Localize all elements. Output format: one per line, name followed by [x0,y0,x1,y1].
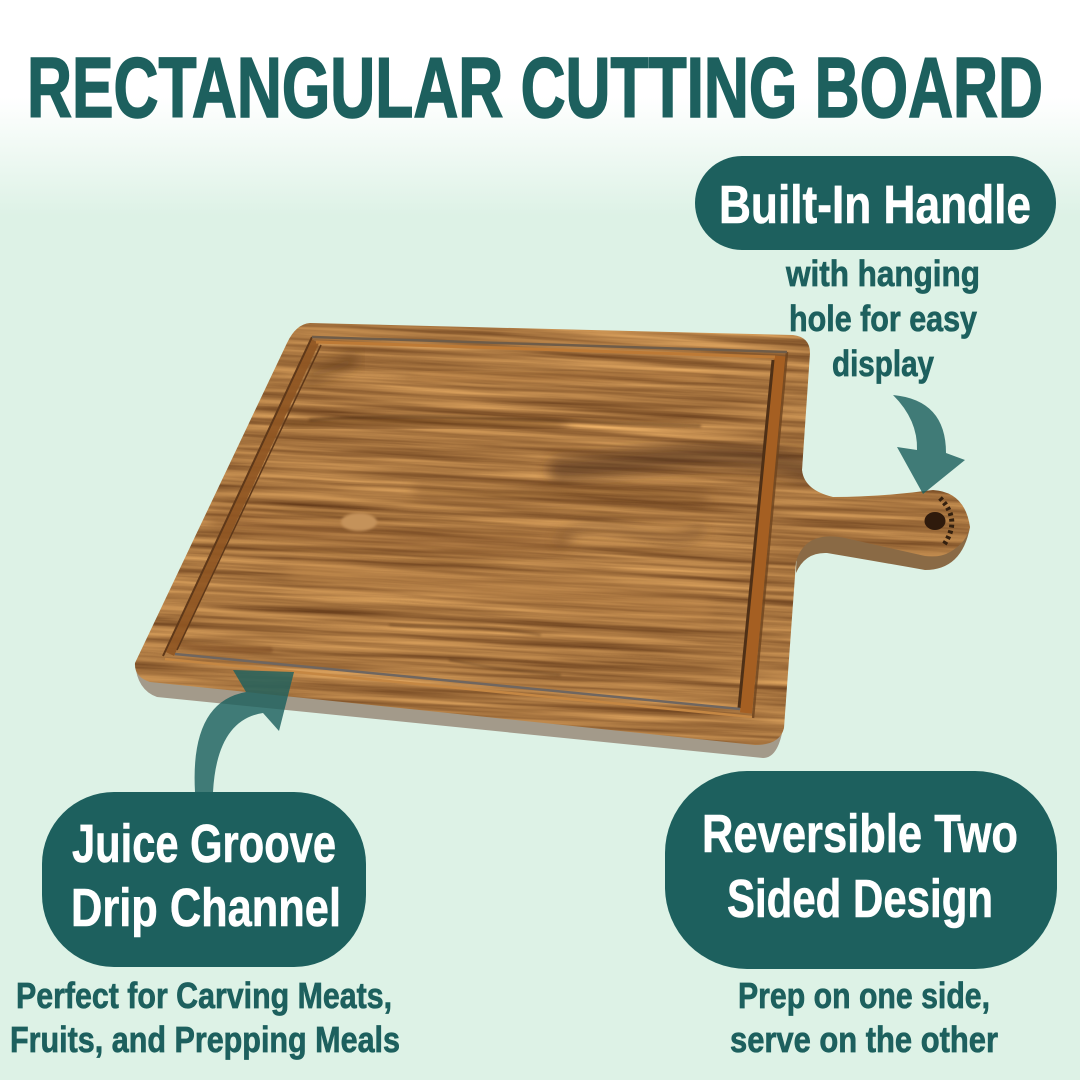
arrow: to handle [893,395,965,494]
pill [42,792,366,967]
arrow: to juice groove [195,670,294,792]
handle hanging hole [924,512,946,530]
heading: Juice Groove [72,814,336,874]
groove channel: bottom [175,654,740,709]
wood grain [134,323,970,745]
wood top surface [134,323,970,745]
groove channel: top [312,337,787,352]
groove channel: right [746,356,780,713]
description [785,253,980,384]
callout: juice groove [10,792,400,1060]
description: Prep on one side, [738,975,990,1016]
description: with hanging [785,253,980,294]
callout: built-in handle [695,156,1056,384]
board side edge [135,660,786,758]
cutting board [134,323,970,758]
description: Perfect for Carving Meats, [16,975,392,1016]
handle side edge [796,520,970,573]
callout: reversible: serve on the other [730,1019,998,1060]
brand stamp [940,498,952,546]
callout: reversible: Sided Design [727,869,993,929]
juice groove [163,337,787,718]
description: display [832,343,934,384]
callout: juice groove: Drip Channel [71,878,341,938]
callout: juice groove: Fruits, and Prepping Meals [10,1019,400,1060]
pill [665,771,1057,969]
groove channel: left [170,341,315,654]
knot [341,513,377,531]
description: hole for easy [789,298,977,339]
callout: reversible [665,771,1057,1060]
pill [695,156,1056,250]
dark figure patches [180,360,810,675]
